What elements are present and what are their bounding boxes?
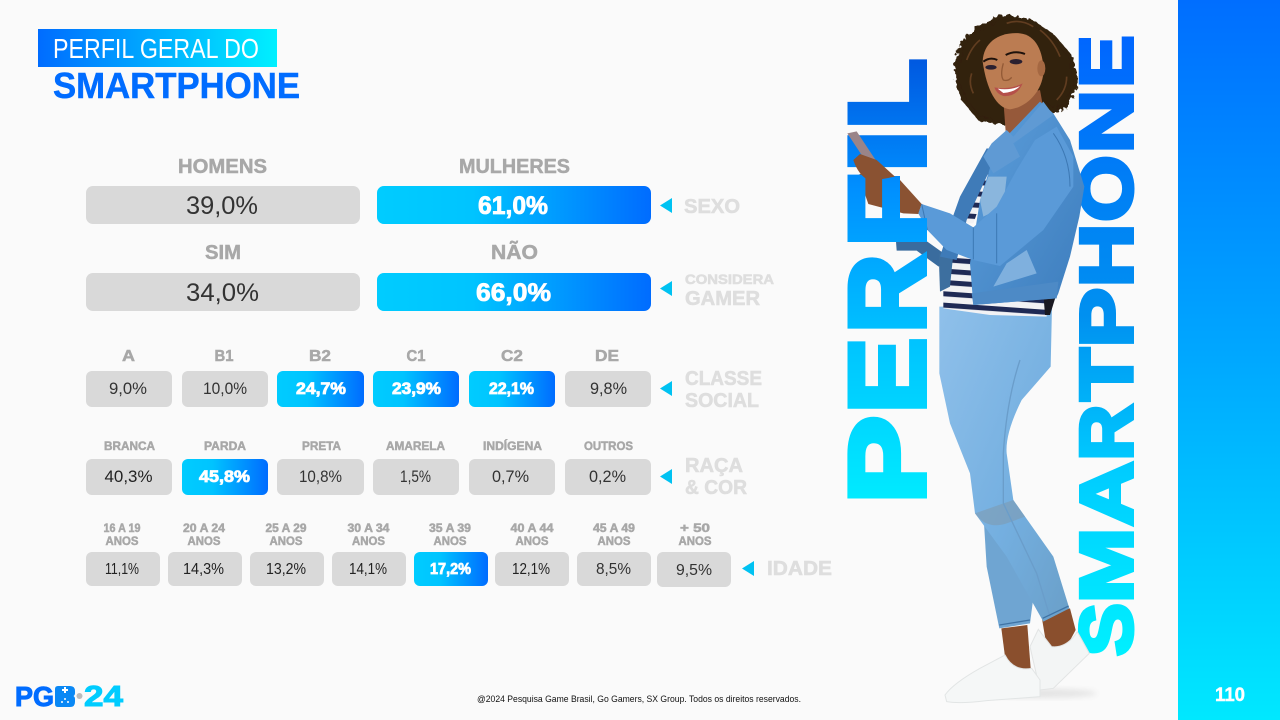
headers: idade: ANOS [678, 536, 712, 548]
headers: idade: ANOS [270, 536, 303, 548]
far sleeve piece [896, 242, 948, 267]
cells: classe: 22,1% [489, 380, 534, 398]
headers: idade: ANOS [106, 536, 139, 548]
title line 2: SMARTPHONE [53, 65, 300, 106]
fingers [853, 154, 895, 180]
headers: raca: PRETA [302, 439, 341, 453]
side label: classe social: CLASSE [685, 368, 762, 390]
value: sim: 34,0% [186, 279, 259, 307]
cells: classe: 9,0% [109, 380, 147, 398]
cells: raca: 40,3% [104, 468, 153, 486]
side label: considera gamer: CONSIDERA [685, 272, 774, 287]
upper body [858, 17, 1084, 317]
front ankle [1001, 625, 1031, 672]
vertical title: SMARTPHONE: O [1065, 155, 1148, 222]
smile [994, 83, 1023, 96]
headers: classe: C2 [501, 348, 523, 365]
vertical title: SMARTPHONE: T [1065, 348, 1148, 401]
hem shadow [1043, 293, 1057, 315]
headers: classe: A [122, 348, 135, 365]
cells: classe: 9,8% [590, 380, 627, 398]
hair highlights [967, 21, 1067, 100]
headers: idade: ANOS [516, 536, 549, 548]
vertical title: PERFIL: I [827, 129, 947, 173]
side label: raca e cor: RAÇA [685, 455, 743, 477]
cells: raca: 1,5% [400, 468, 431, 486]
nose [1002, 63, 1012, 80]
bar: nao [377, 273, 651, 311]
cells: idade: 8,5% [596, 561, 631, 578]
headers: classe [122, 348, 619, 365]
jacket collar [983, 102, 1053, 173]
headers: classe: DE [595, 348, 619, 365]
jacket lower front [939, 253, 953, 292]
jacket left panel [940, 148, 1000, 260]
front leg [939, 307, 1069, 622]
vertical title: SMARTPHONE: E [1065, 36, 1148, 88]
vertical title: SMARTPHONE: M [1065, 528, 1148, 603]
cells: idade: 13,2% [266, 561, 306, 578]
cells: classe: 24,7% [296, 380, 346, 398]
side label: sexo: SEXO [684, 196, 740, 218]
vertical title: SMARTPHONE: R [1065, 405, 1148, 461]
bar: sim [86, 273, 360, 311]
headers: idade: 35 A 39 [429, 523, 471, 535]
cells: classe: 23,9% [392, 380, 441, 398]
headers: idade: + 50 [680, 523, 710, 535]
headers: idade: ANOS [188, 536, 221, 548]
vertical title: PERFIL: E [827, 338, 947, 413]
headers: classe: B2 [309, 348, 331, 365]
vertical title: SMARTPHONE: S [1065, 603, 1148, 656]
bar: homens [86, 186, 360, 224]
forearm [858, 167, 922, 214]
side label: classe social: SOCIAL [685, 390, 759, 412]
headers: idade: 45 A 49 [593, 523, 635, 535]
headers: idade: ANOS [352, 536, 385, 548]
jacket hem [972, 282, 1058, 305]
arrow: sexo [660, 198, 672, 213]
side label: raca e cor: & COR [685, 477, 748, 499]
headers: raca [104, 438, 633, 453]
title line 1: PERFIL GERAL DO [53, 33, 259, 64]
cells: raca: 0,7% [492, 468, 529, 486]
row: sexo [86, 156, 740, 224]
arrow: classe [660, 381, 672, 396]
face [983, 33, 1043, 109]
row: raca e cor [86, 438, 748, 499]
value: mulheres: 61,0% [478, 192, 548, 220]
headers: raca: INDÍGENA [483, 438, 542, 453]
eyes and brows [983, 52, 1025, 70]
headers: idade: ANOS [434, 536, 467, 548]
cells: classe [86, 371, 651, 407]
headers: raca: BRANCA [104, 439, 155, 453]
vertical title: SMARTPHONE: H [1065, 224, 1148, 287]
headers: raca: AMARELA [386, 439, 445, 453]
headers: classe: C1 [406, 348, 426, 365]
lower body [939, 307, 1097, 703]
label: sim: SIM [205, 242, 241, 264]
side label: idade: IDADE [767, 558, 832, 580]
vertical title: SMARTPHONE: N [1065, 90, 1148, 153]
cells: idade: 17,2% [430, 561, 471, 578]
headers: idade: 40 A 44 [510, 523, 554, 535]
cells: idade: 14,3% [183, 561, 224, 578]
shirt [943, 257, 1047, 317]
vertical title: PERFIL: R [827, 254, 947, 333]
headers: idade: ANOS [598, 536, 631, 548]
footer copyright: @2024 Pesquisa Game Brasil, Go Gamers, SX Group. Todos os direitos reservados. [477, 694, 801, 704]
arrow: raca [660, 469, 672, 484]
headers: idade: 30 A 34 [348, 523, 390, 535]
headers: classe: B1 [214, 348, 234, 365]
logo: PGB 24 [15, 681, 123, 713]
cells: idade: 12,1% [512, 561, 550, 578]
headers: idade: 25 A 29 [266, 523, 306, 535]
photo: woman with smartphone [858, 17, 1097, 703]
label: nao: NÃO [491, 241, 538, 264]
front shoe [945, 655, 1040, 703]
phone [847, 131, 877, 167]
side label: considera gamer [685, 272, 774, 310]
row: idade [86, 523, 832, 587]
title ribbon [38, 29, 277, 67]
vertical title: PERFIL: P [827, 416, 947, 504]
cells: raca: 45,8% [199, 468, 250, 486]
sleeve [918, 127, 1073, 266]
hand with phone [847, 131, 895, 180]
cells: idade: 14,1% [349, 561, 387, 578]
arrow: idade [742, 561, 754, 576]
right gradient side panel [1178, 0, 1280, 720]
logo: PGB 24: PG [15, 681, 54, 712]
side label: considera gamer: GAMER [685, 288, 761, 310]
cells: raca: 10,8% [299, 468, 342, 486]
vertical title: SMARTPHONE: P [1065, 288, 1148, 348]
cells: raca [86, 459, 651, 495]
side label: raca e cor [685, 455, 748, 499]
headers: raca: PARDA [204, 439, 246, 453]
headers: idade: 20 A 24 [183, 523, 226, 535]
shoe shadow [983, 689, 1097, 698]
vertical title: PERFIL: L [827, 59, 947, 129]
side label: classe social [685, 368, 762, 412]
row: classe social [86, 348, 762, 412]
bar: mulheres [377, 186, 651, 224]
logo: PGB 24: 24 [84, 681, 123, 713]
arrow: gamer [660, 281, 672, 296]
jacket body [970, 102, 1084, 305]
neck [1003, 90, 1044, 137]
cells: idade: 9,5% [676, 562, 712, 579]
icon: controller B [55, 686, 75, 707]
vertical title: SMARTPHONE: A [1065, 462, 1148, 526]
label: mulheres: MULHERES [459, 156, 570, 178]
cells: raca: 0,2% [589, 468, 626, 486]
cells: idade: 11,1% [105, 561, 139, 578]
label: homens: HOMENS [178, 156, 267, 178]
cells: idade [86, 552, 731, 587]
vertical title: PERFIL: F [827, 174, 947, 247]
value: homens: 39,0% [186, 192, 258, 220]
row: considera gamer [86, 241, 774, 311]
headers: idade [104, 523, 712, 548]
back ankle and shoe [1042, 608, 1076, 647]
page number: 110 [1215, 685, 1245, 706]
headers: idade: 16 A 19 [104, 523, 140, 535]
back hair [957, 17, 1076, 123]
back leg [984, 523, 1040, 628]
title [38, 29, 300, 106]
headers: raca: OUTROS [584, 439, 633, 453]
cells: classe: 10,0% [203, 380, 247, 398]
value: nao: 66,0% [476, 279, 551, 307]
